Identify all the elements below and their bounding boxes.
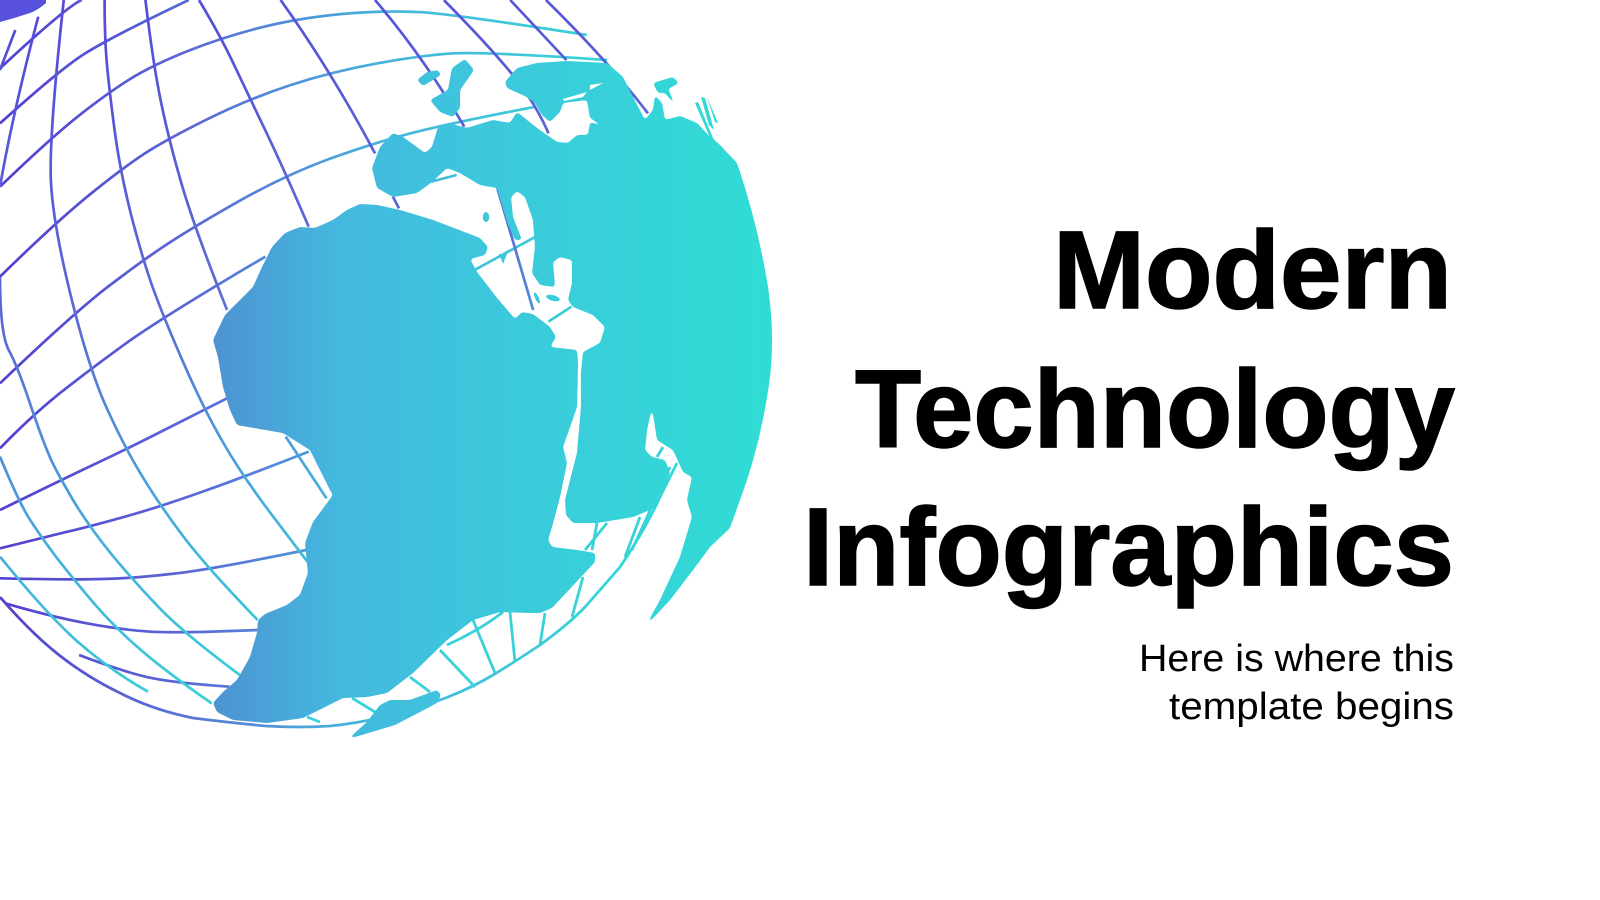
subtitle: Here is where this (1139, 638, 1454, 680)
title: Infographics (803, 486, 1454, 609)
continents (213, 59, 772, 739)
southern island (348, 690, 441, 739)
title: Technology (855, 348, 1455, 471)
landmass: eastern continent (372, 61, 772, 627)
islands (417, 70, 441, 86)
top-left corner fragment (0, 0, 46, 22)
meridians (0, 0, 648, 703)
globe outer rim (0, 463, 677, 727)
subtitle: template begins (1169, 686, 1454, 728)
arctic inlets (563, 83, 603, 101)
small inland islands and coastal streaks (483, 97, 718, 304)
lower right ribs (307, 447, 670, 722)
parallels (0, 0, 607, 687)
title (803, 209, 1455, 609)
subtitle (1139, 638, 1454, 728)
landmass: western continent (213, 204, 595, 723)
title: Modern (1053, 209, 1452, 332)
